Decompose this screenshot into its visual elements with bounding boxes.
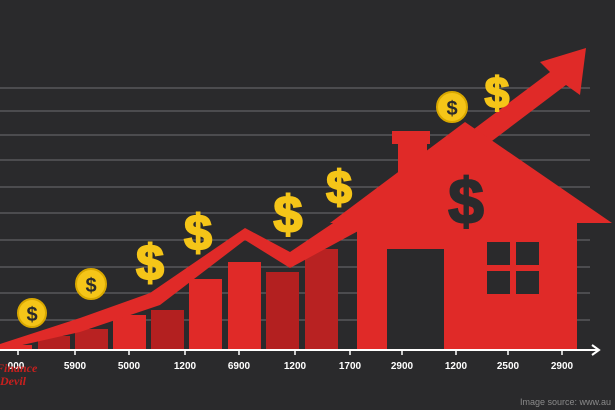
axis labels: 000 <box>8 361 25 372</box>
coins: $ <box>85 275 97 297</box>
dollar signs: $ <box>136 235 164 291</box>
axis labels: 5000 <box>118 361 141 372</box>
watermark: Devil <box>0 374 27 388</box>
axis labels: 1200 <box>174 361 197 372</box>
axis labels: 2500 <box>497 361 520 372</box>
dollar signs: $ <box>326 161 352 213</box>
dollar signs: $ <box>274 186 303 244</box>
coins <box>18 92 467 327</box>
axis labels: 1200 <box>284 361 307 372</box>
coins: $ <box>446 98 458 120</box>
watermark <box>0 361 38 388</box>
x axis <box>0 345 599 355</box>
door <box>387 249 444 350</box>
axis labels: 2900 <box>551 361 574 372</box>
image source credit: Image source: www.au <box>520 397 611 407</box>
window <box>487 242 539 294</box>
axis labels <box>8 361 574 372</box>
arrow: growth trend <box>0 48 586 350</box>
axis labels: 1200 <box>445 361 468 372</box>
axis labels: 6900 <box>228 361 251 372</box>
coins: $ <box>26 304 38 326</box>
chimney <box>398 131 427 181</box>
bar chart <box>0 249 338 350</box>
axis labels: 2900 <box>391 361 414 372</box>
dollar signs <box>136 69 509 291</box>
house <box>330 122 612 350</box>
house dollar sign: $ <box>448 165 484 237</box>
axis labels: 1700 <box>339 361 362 372</box>
dollar signs: $ <box>485 69 509 118</box>
dollar signs: $ <box>184 205 212 261</box>
axis labels: 5900 <box>64 361 87 372</box>
